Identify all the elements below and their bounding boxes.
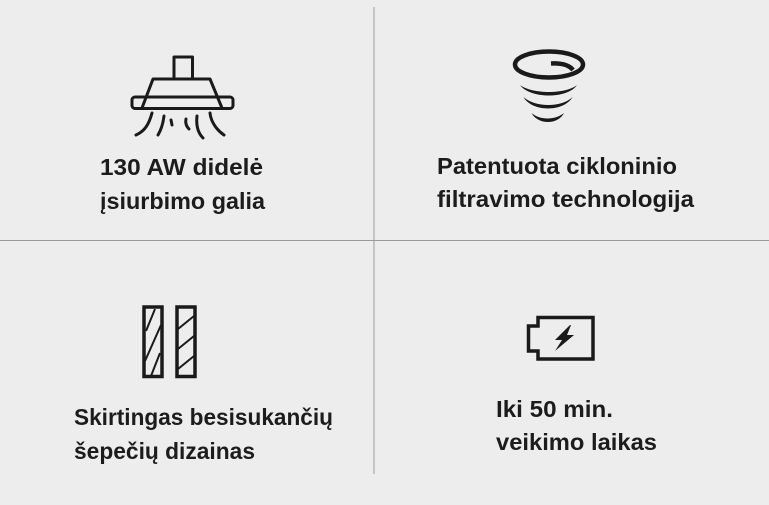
icon: brush rollers: [144, 307, 195, 376]
text: battery heading: Iki 50 min.: [496, 396, 613, 422]
icon: cyclone: [515, 52, 583, 122]
text: cyclone heading: [437, 153, 694, 212]
icon: vacuum head: [132, 57, 233, 138]
panel: battery runtime: [496, 318, 657, 455]
text: cyclone heading: Patentuota cikloninio: [437, 153, 677, 179]
text: brush heading: Skirtingas besisukančių: [74, 404, 333, 430]
panel: cyclone filtration: [437, 52, 694, 212]
text: battery heading: [496, 396, 657, 455]
text: cyclone heading: filtravimo technologija: [437, 186, 694, 212]
icon: battery: [528, 318, 593, 359]
text: suction heading: įsiurbimo galia: [100, 188, 265, 214]
text: suction heading: 130 AW didelė: [100, 154, 263, 180]
text: battery heading: veikimo laikas: [496, 429, 657, 455]
text: suction heading: [100, 154, 265, 214]
panel: suction power: [100, 57, 265, 214]
text: brush heading: šepečių dizainas: [74, 438, 255, 464]
panel: rotating brushes: [74, 307, 333, 464]
text: brush heading: [74, 404, 333, 464]
